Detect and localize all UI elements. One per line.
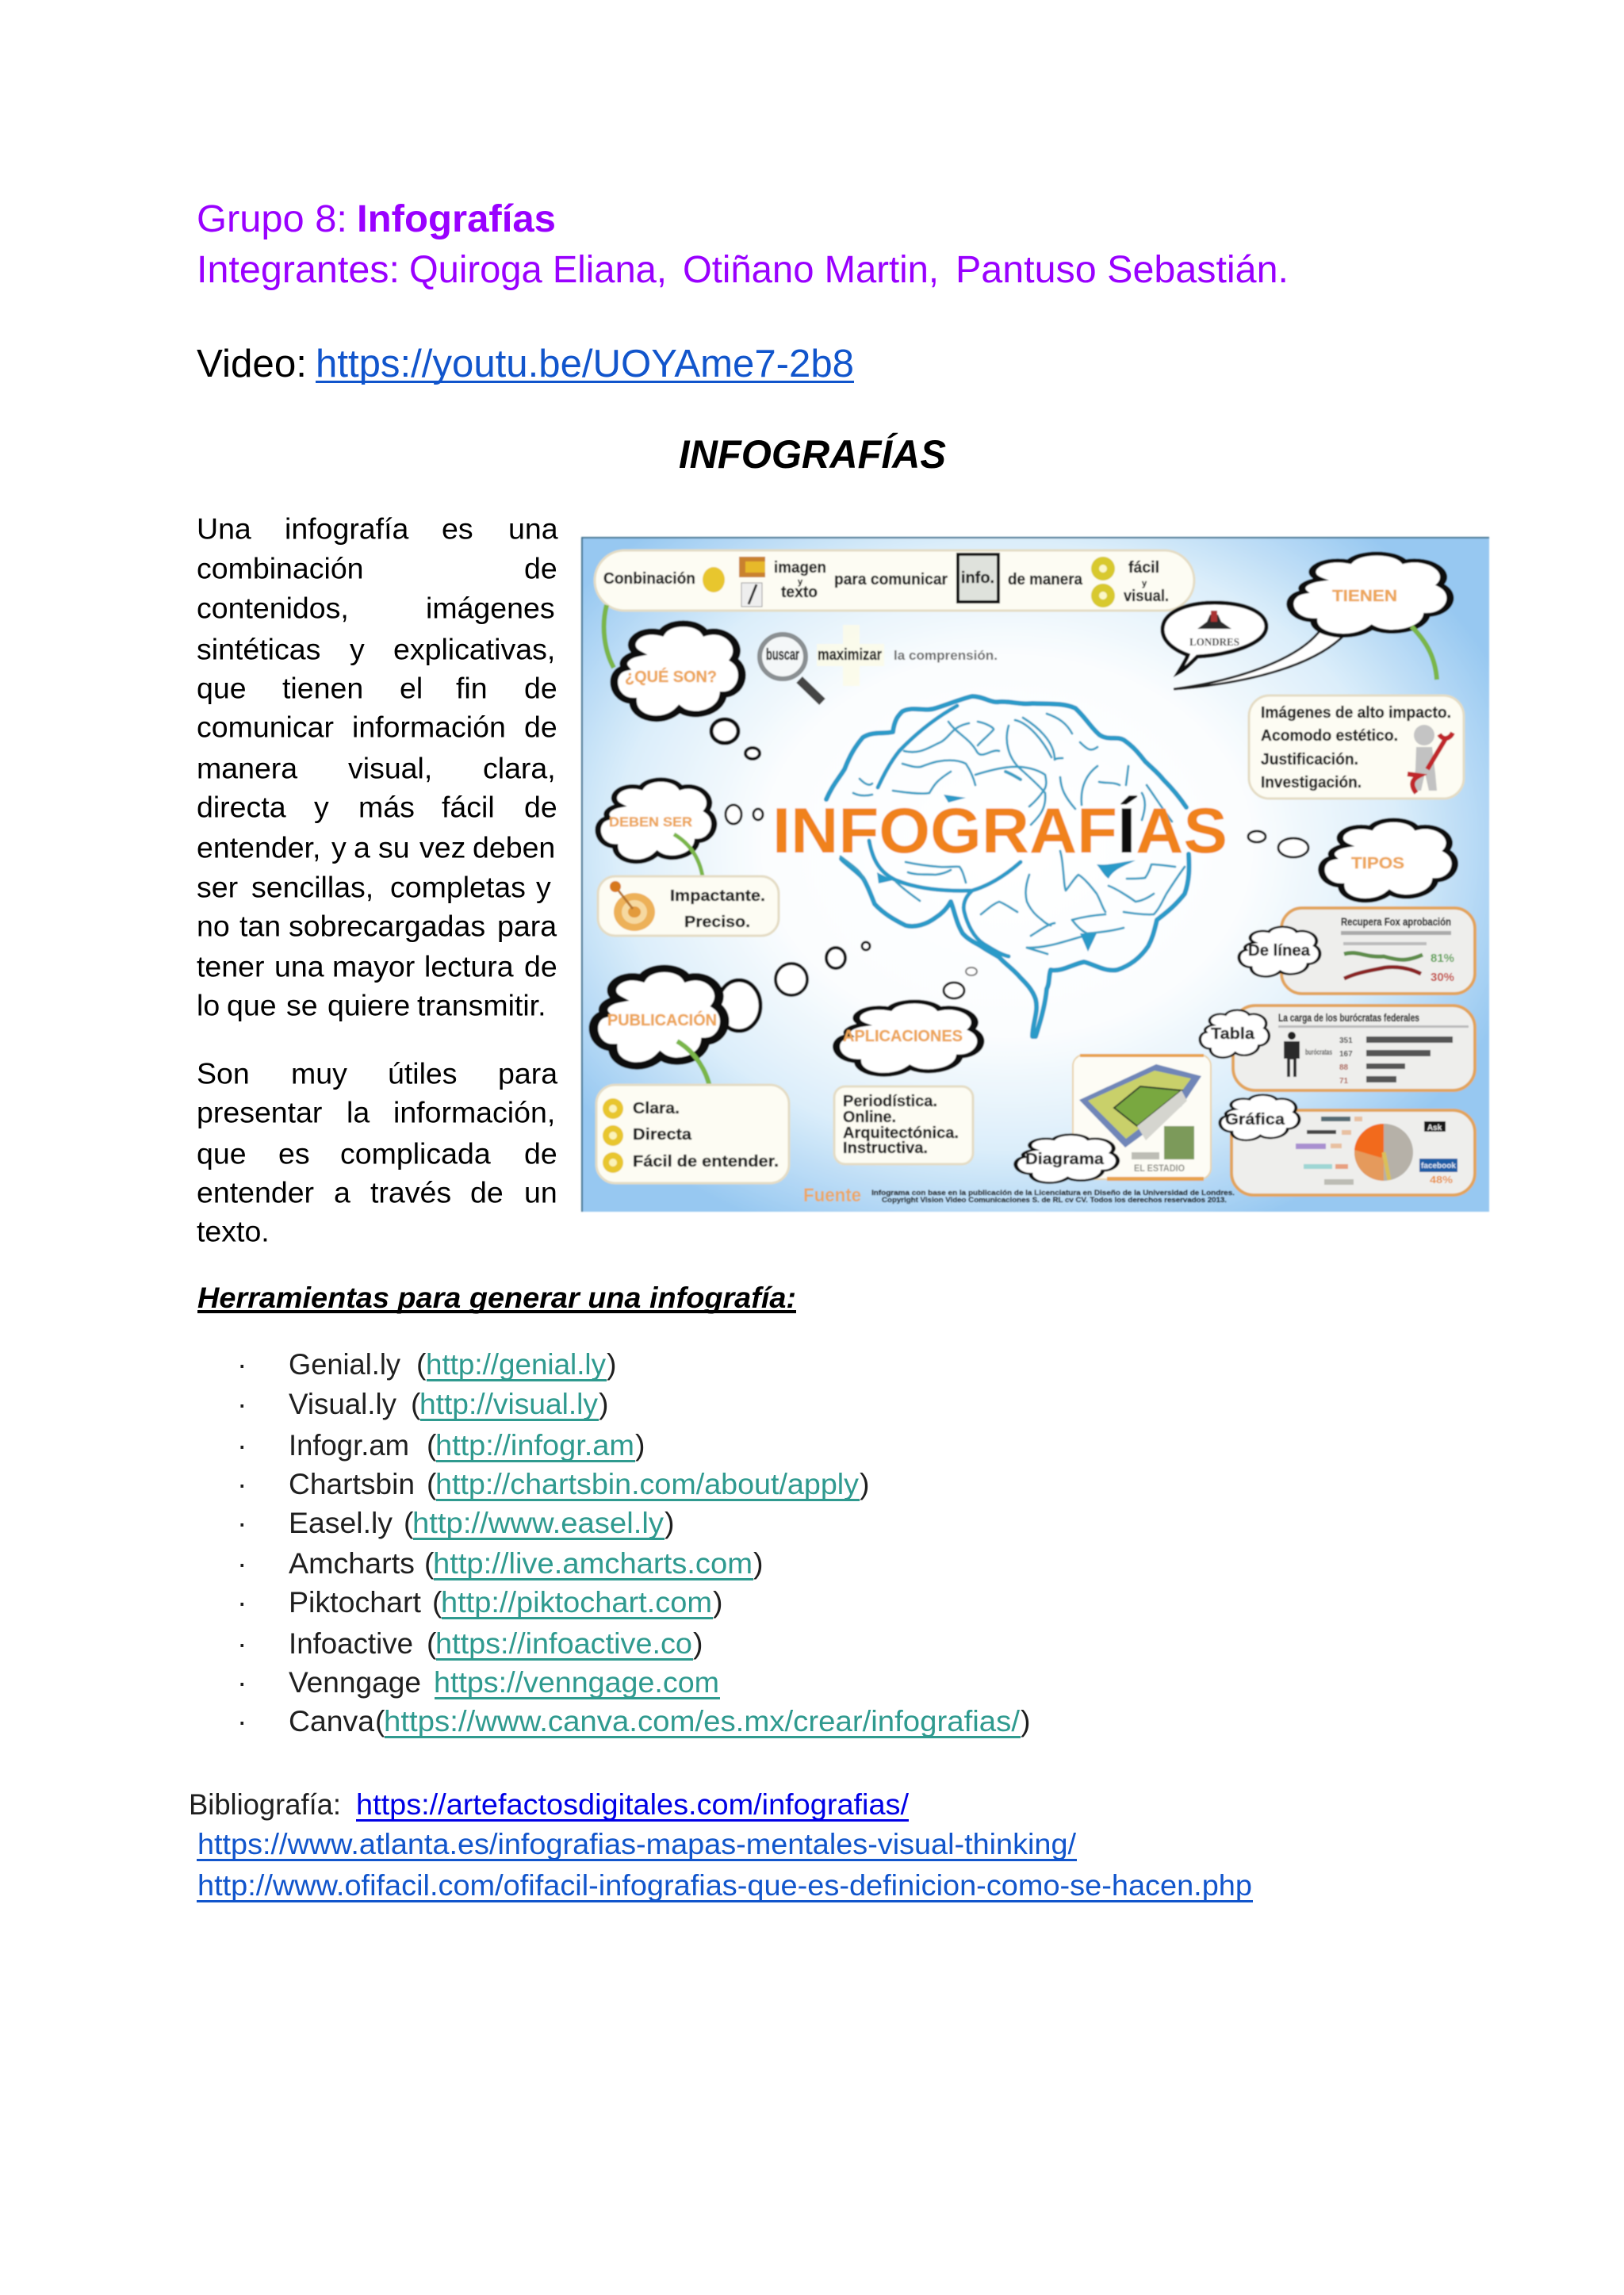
card: stadium diagram	[1073, 1054, 1211, 1181]
text block: definition: fácil	[442, 790, 495, 823]
card: tienen: Investigación.	[1261, 774, 1362, 791]
text block: usefulness: Son	[197, 1056, 250, 1090]
text block: definition: contenidos,	[197, 592, 349, 625]
card: table chart: 71	[1339, 1077, 1349, 1086]
text block: definition: y	[314, 790, 329, 823]
top banner: imagen	[774, 559, 826, 577]
bibliography: https://www.atlanta.es/infografias-mapas-mentales-visual-thinking/	[197, 1827, 1077, 1860]
cloud: tabla	[1200, 1010, 1269, 1058]
card: publicación	[596, 1085, 789, 1183]
text block: definition: tan	[239, 909, 281, 942]
cloud: publicación: PUBLICACIÓN	[607, 1010, 717, 1029]
list of tools: ·	[237, 1585, 247, 1619]
card: table chart: 351	[1339, 1036, 1353, 1045]
text block: usefulness: de	[524, 1137, 557, 1170]
text block: usefulness: a	[334, 1175, 350, 1209]
text block: usefulness: complicada	[340, 1137, 491, 1170]
list of tools: (	[427, 1626, 437, 1660]
text block: definition: entender,	[197, 831, 320, 864]
list of tools: ·	[237, 1546, 247, 1580]
top banner: fácil	[1128, 559, 1159, 577]
text block: usefulness: través	[370, 1175, 451, 1209]
top banner: info.	[961, 569, 994, 587]
text block: definition: a	[354, 831, 370, 864]
panel: infographic image	[581, 537, 1489, 1212]
text block: definition: manera	[197, 752, 297, 785]
list of tools: http://chartsbin.com/about/apply	[435, 1467, 859, 1500]
list of tools: ·	[237, 1704, 247, 1738]
card: line chart: 81%	[1431, 952, 1454, 965]
heading: group title: Integrantes:	[197, 248, 400, 291]
text block: definition: sencillas,	[251, 871, 373, 904]
card: table chart	[1233, 1006, 1475, 1090]
list of tools: (	[404, 1506, 414, 1539]
card: tienen: Acomodo estético.	[1261, 727, 1398, 745]
card: aplicaciones: Online.	[843, 1109, 896, 1126]
card: tienen	[1249, 695, 1464, 799]
heading: group title: Pantuso Sebastián.	[956, 248, 1289, 291]
card: tienen: Justificación.	[1261, 751, 1358, 768]
source credit: Fuente	[803, 1185, 861, 1206]
text block: definition: transmitir.	[417, 988, 546, 1021]
list of tools: (	[416, 1347, 427, 1381]
list of tools: (	[432, 1585, 442, 1619]
text block: usefulness	[197, 1056, 557, 1248]
text block: definition: imágenes	[426, 592, 555, 625]
card: stadium diagram: EL ESTADIO	[1134, 1163, 1185, 1174]
heading: tools: Herramientas para generar una infografía:	[197, 1281, 796, 1314]
video link: Video:	[197, 343, 307, 385]
list of tools	[237, 1347, 1031, 1738]
text block: usefulness: para	[498, 1056, 557, 1090]
list of tools: Infogr.am	[289, 1428, 409, 1462]
text block: definition: es	[442, 512, 473, 546]
cloud: de línea: De línea	[1248, 942, 1311, 960]
text block: definition: de	[524, 552, 557, 585]
text block: definition: de	[524, 950, 557, 983]
list of tools: https://venngage.com	[434, 1665, 719, 1699]
text block: definition: Una	[197, 512, 251, 546]
bibliography	[189, 1787, 1253, 1902]
cloud: de línea	[1239, 927, 1320, 976]
text block: definition: directa	[197, 790, 286, 823]
text block: usefulness: muy	[291, 1056, 347, 1090]
cloud: tabla: Tabla	[1211, 1025, 1255, 1043]
heading: group title: Infografías	[357, 197, 556, 240]
list of tools: https://www.canva.com/es.mx/crear/infografias/	[384, 1704, 1021, 1738]
text block: definition: vez	[419, 831, 465, 864]
heading: group title: Grupo 8:	[197, 197, 347, 240]
video link: https://youtu.be/UOYAme7-2b8	[316, 343, 854, 385]
top banner: y	[798, 577, 803, 587]
cloud: publicación	[593, 942, 870, 1091]
magnifier and caption	[760, 625, 998, 702]
cloud: gráfica	[1220, 1095, 1299, 1140]
card: pie chart	[1231, 1110, 1475, 1195]
source credit	[803, 1185, 1235, 1206]
text block: usefulness: que	[197, 1137, 247, 1170]
text block: usefulness: de	[470, 1175, 504, 1209]
list of tools: )	[693, 1626, 703, 1660]
text block: definition: que	[197, 671, 247, 704]
card: aplicaciones: Instructiva.	[843, 1140, 928, 1157]
text block: definition: ser	[197, 871, 238, 904]
bibliography: http://www.ofifacil.com/ofifacil-infografias-que-es-definicion-como-se-hacen.php	[197, 1868, 1252, 1902]
card: table chart: 167	[1339, 1050, 1353, 1059]
text block: definition: combinación	[197, 552, 364, 585]
cloud: deben ser: DEBEN SER	[609, 814, 692, 829]
text block: definition: de	[524, 790, 557, 823]
speech bubble: Londres logo: LONDRES	[1189, 637, 1239, 649]
card: table chart: burócratas	[1305, 1048, 1332, 1057]
text block: usefulness: un	[524, 1175, 557, 1209]
text block: definition: se	[286, 988, 318, 1021]
list of tools: (	[424, 1546, 435, 1580]
cloud: qué son: ¿QUÉ SON?	[625, 668, 717, 686]
list of tools: Venngage	[289, 1665, 421, 1699]
list of tools: ·	[237, 1626, 247, 1660]
text block: definition: lectura	[424, 950, 514, 983]
list of tools: http://genial.ly	[426, 1347, 606, 1381]
list of tools: ·	[237, 1347, 247, 1381]
text block: definition: de	[524, 711, 557, 744]
list of tools: ·	[237, 1387, 247, 1420]
text block: definition: infografía	[285, 512, 408, 546]
card: aplicaciones	[834, 1086, 973, 1164]
card: line chart: 30%	[1431, 971, 1454, 984]
card: pie chart: Ask	[1427, 1124, 1442, 1132]
heading: group title: Quiroga Eliana,	[409, 248, 667, 291]
list of tools: (	[427, 1428, 437, 1462]
card: aplicaciones: Periodística.	[843, 1093, 937, 1110]
list of tools: ·	[237, 1665, 247, 1699]
card: aplicaciones: Arquitectónica.	[843, 1125, 959, 1142]
text block: definition: y	[331, 831, 347, 864]
text block: definition	[197, 512, 558, 1021]
brain illustration	[826, 696, 1189, 1036]
top banner: de manera	[1008, 571, 1083, 588]
text block: definition: y	[536, 871, 551, 904]
bibliography: https://artefactosdigitales.com/infografias/	[356, 1787, 910, 1821]
list of tools: http://visual.ly	[419, 1387, 598, 1420]
magnifier and caption: buscar	[766, 646, 799, 664]
list of tools: ·	[237, 1428, 247, 1462]
text block: definition: que	[227, 988, 277, 1021]
list of tools: Piktochart	[289, 1585, 422, 1619]
card: deben ser: Preciso.	[684, 914, 750, 931]
text block: definition: más	[358, 790, 415, 823]
cloud: tienen: TIENEN	[1332, 588, 1397, 605]
top banner: y	[1142, 579, 1147, 588]
cloud: tipos: TIPOS	[1351, 855, 1404, 872]
list of tools: Genial.ly	[289, 1347, 400, 1381]
text block: usefulness: la	[347, 1096, 370, 1129]
text block: definition: de	[524, 671, 557, 704]
cloud: gráfica: Gráfica	[1225, 1111, 1285, 1128]
top banner: visual.	[1124, 588, 1169, 605]
list of tools: http://live.amcharts.com	[433, 1546, 753, 1580]
list of tools: Infoactive	[289, 1626, 413, 1660]
top banner	[595, 550, 1194, 611]
list of tools: Easel.ly	[289, 1506, 393, 1539]
text block: definition: mayor	[332, 950, 415, 983]
top banner: Conbinación	[603, 570, 695, 588]
text block: usefulness: información,	[393, 1096, 555, 1129]
top banner: para comunicar	[834, 571, 948, 588]
list of tools: Chartsbin	[289, 1467, 415, 1500]
text block: definition: para	[497, 909, 557, 942]
text block: definition: información	[352, 711, 506, 744]
heading: group title	[197, 197, 1289, 291]
list of tools: )	[665, 1506, 674, 1539]
card: publicación: Directa	[633, 1126, 692, 1144]
text block: definition: explicativas,	[393, 633, 555, 666]
list of tools: ·	[237, 1506, 247, 1539]
card: table chart: La carga de los burócratas federales	[1278, 1011, 1419, 1024]
text block: definition: tienen	[282, 671, 363, 704]
text block: definition: sobrecargadas	[289, 909, 485, 942]
list of tools: http://infogr.am	[435, 1428, 634, 1462]
cloud: aplicaciones: APLICACIONES	[843, 1028, 963, 1045]
cloud: aplicaciones	[837, 967, 981, 1075]
text block: definition: clara,	[483, 752, 556, 785]
list of tools: )	[607, 1347, 617, 1381]
source credit: Infograma con base en la publicación de la Licenciatura en Diseño de la Universidad de Londres.	[871, 1189, 1235, 1197]
magnifier and caption: la comprensión.	[894, 648, 998, 663]
text block: definition: quiere	[327, 988, 410, 1021]
text block: definition: visual,	[348, 752, 432, 785]
list of tools: Canva	[289, 1704, 374, 1738]
speech bubble: Londres logo	[1162, 603, 1266, 672]
text block: definition: una	[274, 950, 324, 983]
list of tools: )	[1021, 1704, 1031, 1738]
list of tools: Amcharts	[289, 1546, 415, 1580]
list of tools: http://piktochart.com	[441, 1585, 712, 1619]
text block: definition: el	[400, 671, 423, 704]
text block: definition: su	[378, 831, 410, 864]
text block: definition: una	[508, 512, 558, 546]
card: deben ser: Impactante.	[670, 887, 765, 905]
text block: definition: fin	[456, 671, 488, 704]
list of tools: )	[753, 1546, 763, 1580]
list of tools: (	[411, 1387, 421, 1420]
text block: definition: deben	[473, 831, 555, 864]
text block: usefulness: es	[278, 1137, 310, 1170]
text block: definition: completas	[390, 871, 526, 904]
text block: definition: sintéticas	[197, 633, 320, 666]
list of tools: (	[375, 1704, 385, 1738]
list of tools: http://www.easel.ly	[412, 1506, 664, 1539]
cloud: tienen	[1174, 554, 1450, 689]
card: tienen: Imágenes de alto impacto.	[1261, 704, 1451, 722]
text block: usefulness: entender	[197, 1175, 314, 1209]
text block: definition: tener	[197, 950, 264, 983]
list of tools: https://infoactive.co	[435, 1626, 692, 1660]
cloud: diagrama: Diagrama	[1025, 1151, 1105, 1168]
bibliography: Bibliografía:	[189, 1787, 341, 1821]
text block: definition: y	[350, 633, 365, 666]
list of tools: )	[860, 1467, 869, 1500]
list of tools: Visual.ly	[289, 1387, 396, 1420]
magnifier and caption: maximizar	[818, 646, 882, 664]
infographic main title: INFOGRAFÍAS	[772, 795, 1228, 867]
cloud: tipos	[1248, 820, 1455, 901]
text block: usefulness: texto.	[197, 1215, 270, 1248]
card: table chart: 88	[1339, 1063, 1349, 1072]
card: line chart: Recupera Fox aprobación	[1341, 915, 1451, 928]
text block: definition: comunicar	[197, 711, 334, 744]
section title: INFOGRAFÍAS	[679, 432, 946, 477]
cloud: diagrama	[1016, 1135, 1118, 1183]
source credit: Copyright Vision Video Comunicaciones S. de RL cv CV. Todos los derechos reservados 2013.	[882, 1196, 1227, 1204]
list of tools: (	[427, 1467, 437, 1500]
cloud: deben ser	[598, 780, 763, 882]
cloud: qué son	[604, 605, 760, 759]
text block: definition: no	[197, 909, 230, 942]
list of tools: )	[599, 1387, 609, 1420]
text block: definition: lo	[197, 988, 220, 1021]
card: deben ser	[598, 876, 779, 936]
list of tools: )	[635, 1428, 645, 1462]
card: pie chart: 48%	[1430, 1174, 1453, 1186]
heading: group title: Otiñano Martin,	[683, 248, 939, 291]
text block: usefulness: útiles	[388, 1056, 458, 1090]
card: publicación: Clara.	[633, 1100, 680, 1117]
list of tools: )	[713, 1585, 723, 1619]
card: publicación: Fácil de entender.	[633, 1153, 779, 1170]
card: line chart	[1281, 908, 1475, 994]
list of tools: ·	[237, 1467, 247, 1500]
card: pie chart: facebook	[1421, 1162, 1456, 1170]
text block: usefulness: presentar	[197, 1096, 322, 1129]
top banner: texto	[781, 584, 818, 601]
